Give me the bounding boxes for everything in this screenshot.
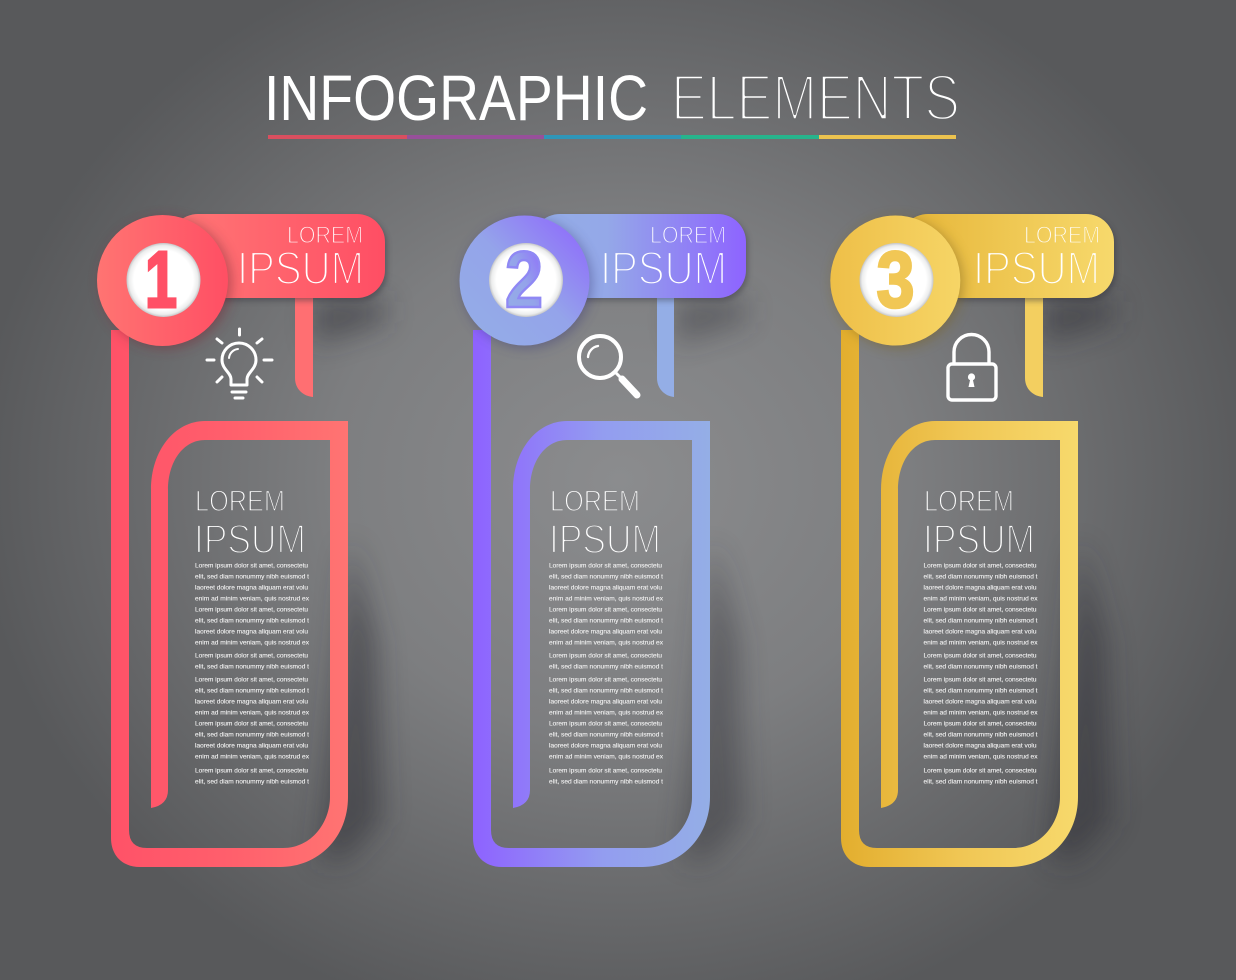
text block 3: laoreet dolore magna aliquam erat volu: [924, 628, 1037, 636]
text block 1: elit, sed diam nonummy nibh euismod t: [195, 574, 309, 580]
text block 3: [923, 485, 1038, 786]
text block 2: laoreet dolore magna aliquam erat volu: [549, 698, 662, 706]
text block 1: Lorem ipsum dolor sit amet, consectetu: [195, 606, 308, 614]
text block 2: Lorem ipsum dolor sit amet, consectetu: [549, 768, 662, 774]
title: [264, 61, 960, 134]
text block 1: Lorem ipsum dolor sit amet, consectetu: [195, 720, 308, 728]
text block 2: laoreet dolore magna aliquam erat volu: [549, 584, 662, 592]
text block 3: laoreet dolore magna aliquam erat volu: [924, 698, 1037, 706]
text block 2: elit, sed diam nonummy nibh euismod t: [549, 778, 663, 786]
text block 1: laoreet dolore magna aliquam erat volu: [195, 698, 308, 706]
text block 2: [549, 485, 664, 786]
text block 2: enim ad minim veniam, quis nostrud ex: [549, 640, 664, 646]
text block 2: elit, sed diam nonummy nibh euismod t: [549, 618, 663, 624]
text block 3: elit, sed diam nonummy nibh euismod t: [924, 688, 1038, 694]
text block 1: laoreet dolore magna aliquam erat volu: [195, 628, 308, 636]
text block 1: LOREM: [195, 485, 285, 518]
text block 1: elit, sed diam nonummy nibh euismod t: [195, 688, 309, 694]
header pill 3: [900, 214, 1116, 301]
text block 3: Lorem ipsum dolor sit amet, consectetu: [924, 652, 1037, 660]
text block 1: enim ad minim veniam, quis nostrud ex: [195, 710, 310, 716]
text block 1: Lorem ipsum dolor sit amet, consectetu: [195, 652, 308, 660]
header pill 2: IPSUM: [600, 242, 727, 294]
text block 3: elit, sed diam nonummy nibh euismod t: [924, 778, 1038, 786]
number badge 2: 2: [505, 235, 543, 324]
text block 3: enim ad minim veniam, quis nostrud ex: [924, 640, 1038, 646]
text block 2: Lorem ipsum dolor sit amet, consectetu: [549, 720, 662, 728]
text block 3: enim ad minim veniam, quis nostrud ex: [924, 710, 1038, 716]
header pill 2: LOREM: [650, 222, 726, 249]
text block 1: elit, sed diam nonummy nibh euismod t: [195, 778, 309, 786]
text block 1: [194, 485, 310, 786]
connector strip 3: [1025, 290, 1043, 397]
text block 1: Lorem ipsum dolor sit amet, consectetu: [195, 562, 308, 570]
text block 3: enim ad minim veniam, quis nostrud ex: [924, 596, 1038, 602]
number badge 3: 3: [876, 235, 914, 324]
text block 1: elit, sed diam nonummy nibh euismod t: [195, 732, 309, 738]
panel 1: red: [97, 214, 387, 867]
text block 3: IPSUM: [923, 516, 1035, 562]
text block 2: elit, sed diam nonummy nibh euismod t: [549, 574, 663, 580]
icon: light bulb: [207, 329, 272, 398]
text block 3: enim ad minim veniam, quis nostrud ex: [924, 754, 1038, 760]
text block 2: elit, sed diam nonummy nibh euismod t: [549, 732, 663, 738]
text block 2: laoreet dolore magna aliquam erat volu: [549, 628, 662, 636]
text block 2: elit, sed diam nonummy nibh euismod t: [549, 688, 663, 694]
header pill 1: LOREM: [287, 222, 363, 249]
icon: magnifying glass: [579, 336, 637, 395]
text block 2: Lorem ipsum dolor sit amet, consectetu: [549, 676, 662, 684]
text block 2: Lorem ipsum dolor sit amet, consectetu: [549, 562, 662, 570]
icon: padlock: [948, 334, 996, 400]
number badge 2: [460, 216, 592, 348]
text block 2: Lorem ipsum dolor sit amet, consectetu: [549, 606, 662, 614]
text block 3: elit, sed diam nonummy nibh euismod t: [924, 574, 1038, 580]
text block 2: enim ad minim veniam, quis nostrud ex: [549, 710, 664, 716]
text block 2: enim ad minim veniam, quis nostrud ex: [549, 596, 664, 602]
title: INFOGRAPHIC: [264, 62, 648, 134]
text block 1: enim ad minim veniam, quis nostrud ex: [195, 754, 310, 760]
connector strip 1: [295, 290, 313, 397]
text block 3: Lorem ipsum dolor sit amet, consectetu: [924, 606, 1037, 614]
text block 3: elit, sed diam nonummy nibh euismod t: [924, 732, 1038, 738]
text block 2: IPSUM: [549, 516, 661, 562]
connector strip 2: [657, 290, 674, 397]
text block 3: elit, sed diam nonummy nibh euismod t: [924, 664, 1038, 670]
text block 3: elit, sed diam nonummy nibh euismod t: [924, 618, 1038, 624]
text block 1: laoreet dolore magna aliquam erat volu: [195, 742, 308, 750]
header pill 1: [170, 214, 387, 301]
number badge 1: 1: [145, 235, 177, 324]
header pill 3: IPSUM: [973, 242, 1100, 294]
frame 1: [111, 330, 348, 867]
text block 2: enim ad minim veniam, quis nostrud ex: [549, 754, 664, 760]
text block 3: laoreet dolore magna aliquam erat volu: [924, 742, 1037, 750]
panel 2: purple: [460, 214, 748, 867]
text block 1: Lorem ipsum dolor sit amet, consectetu: [195, 676, 308, 684]
header pill 3: LOREM: [1024, 222, 1100, 249]
text block 2: LOREM: [550, 485, 640, 518]
text block 2: laoreet dolore magna aliquam erat volu: [549, 742, 662, 750]
text block 3: Lorem ipsum dolor sit amet, consectetu: [924, 562, 1037, 570]
panel 3: yellow: [830, 214, 1116, 867]
text block 3: laoreet dolore magna aliquam erat volu: [924, 584, 1037, 592]
text block 1: enim ad minim veniam, quis nostrud ex: [195, 596, 310, 602]
text block 2: Lorem ipsum dolor sit amet, consectetu: [549, 652, 662, 660]
title: ELEMENTS: [671, 61, 960, 134]
number badge 1: [97, 215, 232, 348]
text block 3: Lorem ipsum dolor sit amet, consectetu: [924, 676, 1037, 684]
text block 1: enim ad minim veniam, quis nostrud ex: [195, 640, 310, 646]
number badge 3: [830, 216, 963, 348]
frame 3: [841, 330, 1078, 867]
text block 3: LOREM: [924, 485, 1014, 518]
text block 1: elit, sed diam nonummy nibh euismod t: [195, 664, 309, 670]
header pill 2: [532, 214, 748, 301]
frame 2: [473, 330, 710, 867]
title colour rule: [268, 135, 956, 139]
text block 1: Lorem ipsum dolor sit amet, consectetu: [195, 768, 308, 774]
text block 3: Lorem ipsum dolor sit amet, consectetu: [924, 720, 1037, 728]
header pill 1: IPSUM: [237, 242, 364, 294]
text block 3: Lorem ipsum dolor sit amet, consectetu: [924, 768, 1037, 774]
text block 1: elit, sed diam nonummy nibh euismod t: [195, 618, 309, 624]
text block 1: laoreet dolore magna aliquam erat volu: [195, 584, 308, 592]
text block 2: elit, sed diam nonummy nibh euismod t: [549, 664, 663, 670]
text block 1: IPSUM: [194, 516, 306, 562]
